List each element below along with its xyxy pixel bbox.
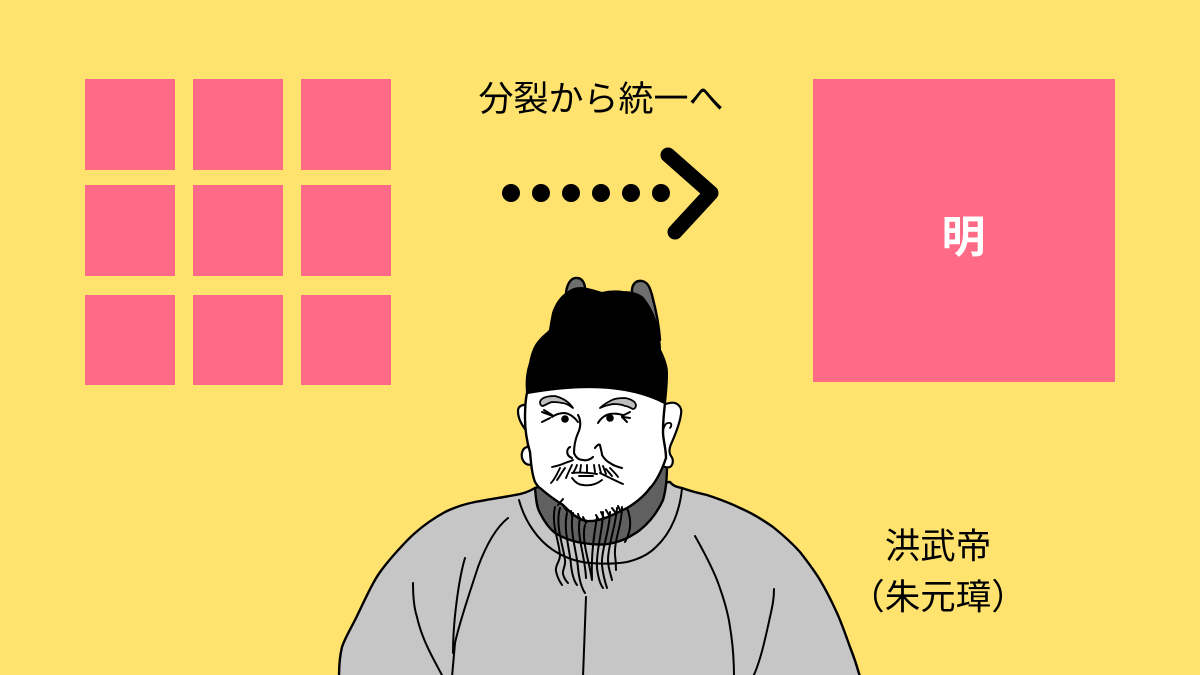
hat wings <box>566 278 585 295</box>
dark collar <box>535 465 667 544</box>
moustache and mouth <box>551 460 623 485</box>
eyes <box>542 410 630 423</box>
beard <box>554 499 630 593</box>
heading: from division to unification: 分裂から統一へ <box>478 80 724 119</box>
hat <box>527 288 667 403</box>
illustration: Hongwu Emperor portrait <box>339 278 860 675</box>
panel: unified Ming state <box>813 79 1115 382</box>
grid of nine divided states <box>85 79 391 385</box>
right ear <box>661 403 681 467</box>
caption: Hongwu Emperor (Zhu Yuanzhang): （朱元璋） <box>849 577 1027 617</box>
panel: unified Ming state: 明 <box>942 213 986 262</box>
face <box>525 387 666 521</box>
robe <box>339 482 860 675</box>
nose <box>567 415 622 468</box>
caption: Hongwu Emperor (Zhu Yuanzhang) <box>849 526 1027 617</box>
arrow: dotted line with chevron <box>502 155 711 232</box>
eyebrows <box>540 396 573 408</box>
left ear <box>518 405 533 465</box>
caption: Hongwu Emperor (Zhu Yuanzhang): 洪武帝 <box>885 526 991 566</box>
